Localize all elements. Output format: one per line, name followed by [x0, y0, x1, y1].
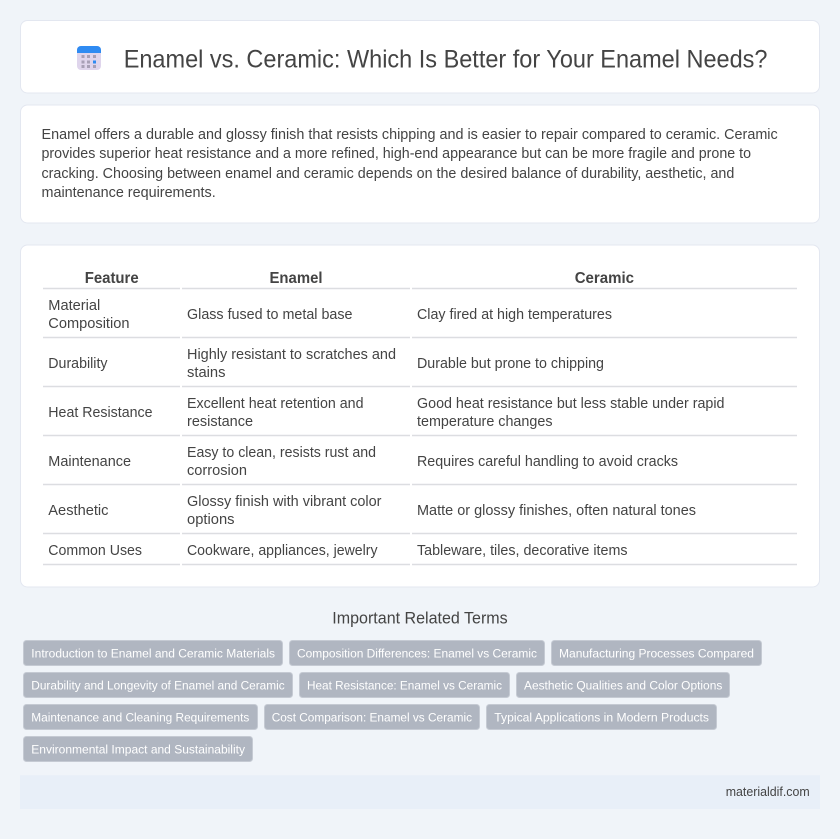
table row: aesthetic: options	[187, 512, 234, 528]
table row: durability	[48, 347, 604, 381]
table row: heat resistance	[48, 396, 725, 430]
table row: durability: Durability	[48, 356, 108, 372]
tag	[290, 640, 544, 666]
table row: aesthetic	[48, 494, 696, 528]
table header row: Ceramic	[575, 270, 634, 287]
table row: maintenance	[48, 445, 678, 479]
table row: maintenance: Requires careful handling to avoid cracks	[417, 454, 678, 470]
panel: introduction	[20, 105, 820, 223]
table row: aesthetic: Aesthetic	[48, 503, 108, 519]
tag	[516, 672, 730, 698]
panel: comparison table	[20, 245, 820, 587]
icon: calendar	[77, 46, 101, 70]
panel: related term tags	[24, 640, 762, 762]
tag: Composition Differences: Enamel vs Ceramic	[297, 646, 537, 660]
tag: Durability and Longevity of Enamel and Ceramic	[31, 678, 285, 692]
table row: heat resistance: resistance	[187, 414, 253, 430]
table header row	[85, 270, 634, 287]
text block: introduction paragraph: Enamel offers a durable and glossy finish that resists chipping and is easier to repair compared to ceramic. Ceramic	[42, 127, 778, 143]
footer	[20, 775, 820, 809]
table row: maintenance: Maintenance	[48, 454, 131, 470]
table row: heat resistance: Excellent heat retention and	[187, 396, 364, 412]
tag	[24, 640, 282, 666]
text block: introduction paragraph	[42, 127, 778, 201]
table row: common uses: Common Uses	[48, 543, 142, 559]
table row: durability: Highly resistant to scratches and	[187, 347, 396, 363]
tag: Typical Applications in Modern Products	[494, 710, 709, 724]
table row: material composition: Clay fired at high temperatures	[417, 307, 612, 323]
table row: material composition	[48, 298, 612, 332]
text block: introduction paragraph: provides superior heat resistance and a more refined, high-end appearance but can be more fragile and prone to	[42, 146, 751, 162]
tag	[24, 736, 252, 762]
tag: Introduction to Enamel and Ceramic Materials	[31, 646, 275, 660]
tag: Cost Comparison: Enamel vs Ceramic	[272, 710, 472, 724]
tag	[24, 704, 258, 730]
table row: aesthetic: Matte or glossy finishes, often natural tones	[417, 503, 696, 519]
table header row: Feature	[85, 270, 139, 287]
title: Enamel vs. Ceramic: Which Is Better for Your Enamel Needs?	[124, 46, 767, 74]
tag	[486, 704, 716, 730]
text block: introduction paragraph: cracking. Choosing between enamel and ceramic depends on the desired balance of durability, aesthetic, and	[42, 166, 734, 182]
table row: maintenance: Easy to clean, resists rust and	[187, 445, 376, 461]
tag	[264, 704, 480, 730]
heading: important related terms: Important Related Terms	[332, 609, 508, 627]
table row: aesthetic: Glossy finish with vibrant color	[187, 494, 382, 510]
tag: Manufacturing Processes Compared	[559, 646, 754, 660]
table row: durability: Durable but prone to chipping	[417, 356, 604, 372]
panel: page header	[20, 20, 820, 93]
tag	[24, 672, 292, 698]
tag: Aesthetic Qualities and Color Options	[524, 678, 722, 692]
table row: common uses: Tableware, tiles, decorative items	[417, 543, 628, 559]
text block: introduction paragraph: maintenance requirements.	[42, 185, 216, 201]
tag: Heat Resistance: Enamel vs Ceramic	[307, 678, 502, 692]
footer source text: materialdif.com	[726, 784, 810, 799]
table row: heat resistance: Heat Resistance	[48, 405, 152, 421]
table row: heat resistance: temperature changes	[417, 414, 552, 430]
tag	[552, 640, 762, 666]
table row: material composition: Glass fused to metal base	[187, 307, 352, 323]
tag	[300, 672, 510, 698]
table row: material composition: Material	[48, 298, 100, 314]
table header row: Enamel	[270, 270, 322, 287]
tag: Environmental Impact and Sustainability	[31, 742, 246, 756]
tag: Maintenance and Cleaning Requirements	[31, 710, 249, 724]
table row: heat resistance: Good heat resistance but less stable under rapid	[417, 396, 724, 412]
table row: common uses: Cookware, appliances, jewelry	[187, 543, 378, 559]
table row: material composition: Composition	[48, 316, 129, 332]
table row: maintenance: corrosion	[187, 463, 247, 479]
table row: durability: stains	[187, 365, 226, 381]
table row: common uses	[48, 543, 628, 559]
